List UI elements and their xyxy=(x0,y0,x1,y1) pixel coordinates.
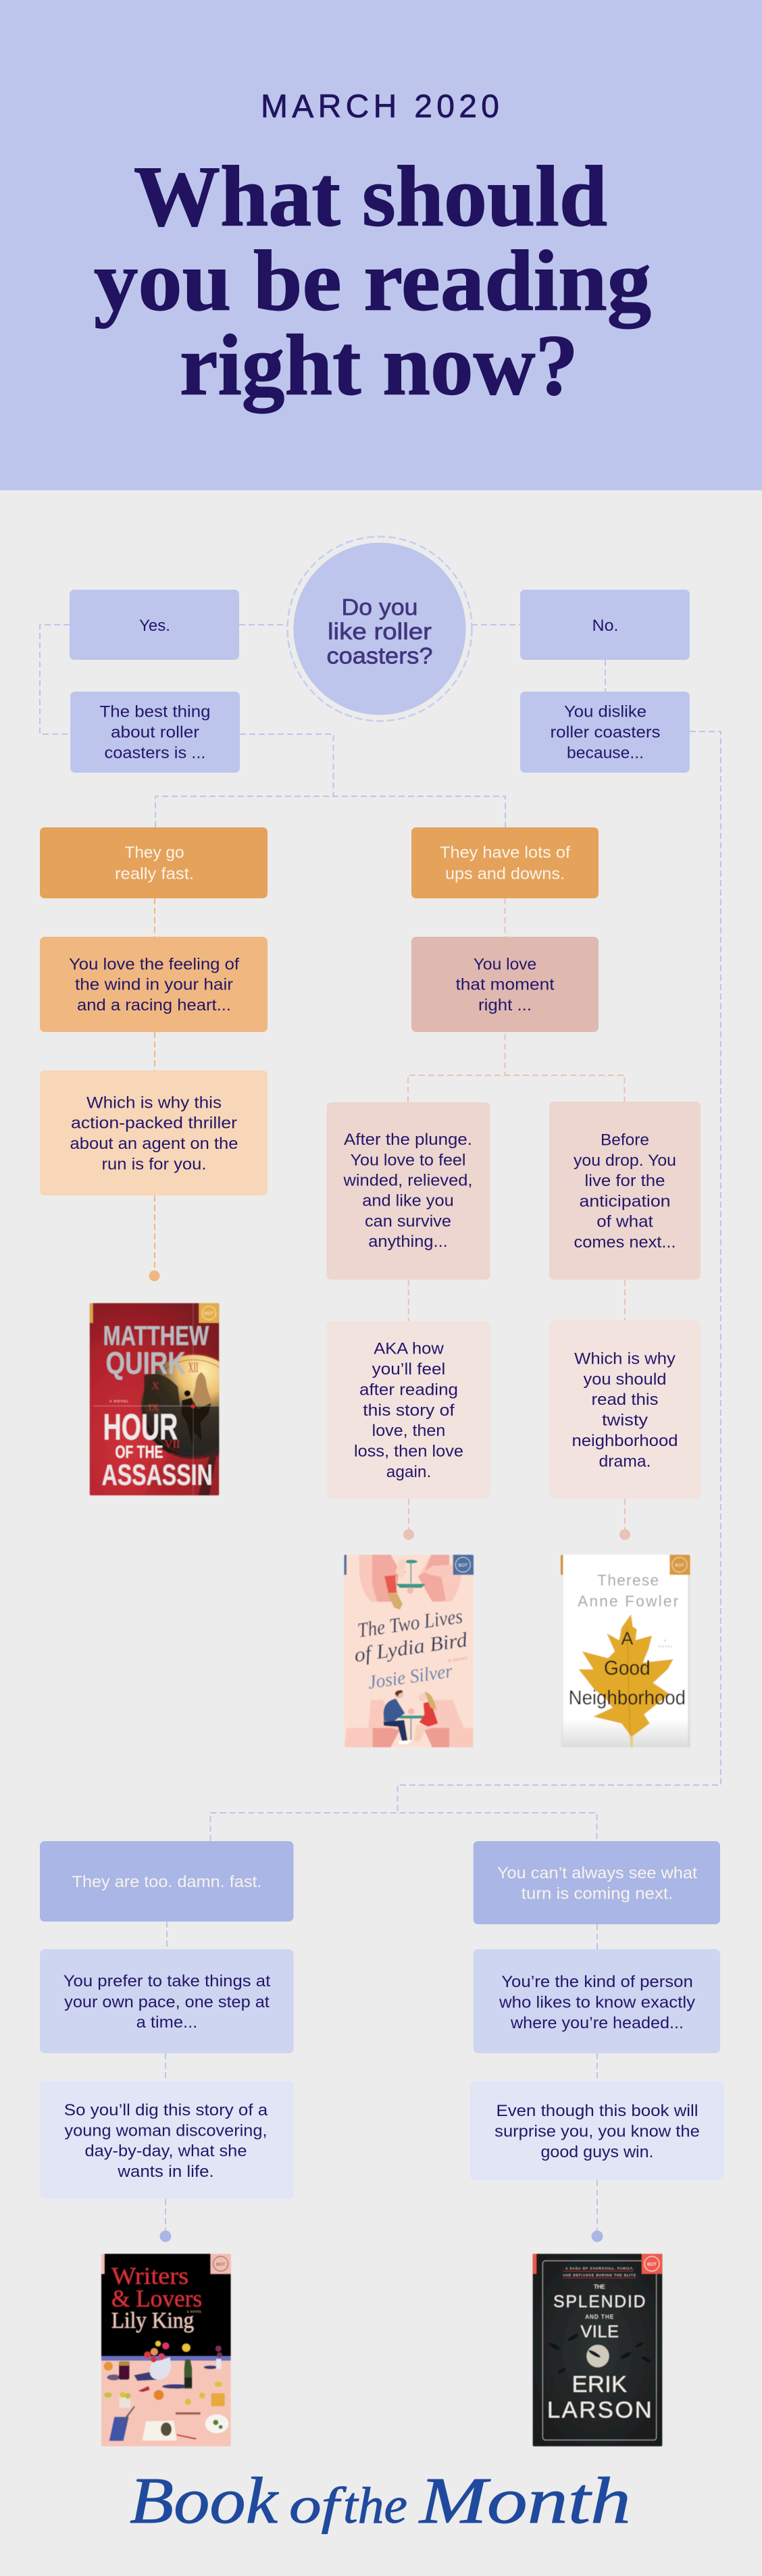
box: action-packed thriller: action-packed thriller xyxy=(71,1114,237,1133)
box: after the plunge xyxy=(326,1102,490,1280)
book: A Good Neighborhood: A xyxy=(664,1639,666,1642)
box: they go really fast: really fast. xyxy=(115,865,194,883)
box: young woman discovering: wants in life. xyxy=(117,2163,214,2181)
box: good guys win xyxy=(470,2081,724,2180)
book: Writers & Lovers: Writers xyxy=(111,2263,188,2290)
box: best thing: about roller xyxy=(111,723,199,742)
box: wind in your hair: and a racing heart... xyxy=(77,996,231,1014)
book: A Good Neighborhood xyxy=(561,1555,690,1747)
book: Writers & Lovers: Lily King xyxy=(111,2309,194,2334)
book: Hour of the Assassin: IX xyxy=(148,1402,159,1413)
box: good guys win: surprise you, you know the xyxy=(494,2123,700,2141)
box: your own pace: a time... xyxy=(136,2013,197,2032)
book: The Two Lives of Lydia Bird: of Lydia Bird xyxy=(353,1628,469,1667)
box: you love that moment: that moment xyxy=(455,976,555,994)
title: What should xyxy=(134,149,607,244)
book: Hour of the Assassin: ASSASSIN xyxy=(101,1459,213,1491)
connectors: top section xyxy=(40,625,721,1841)
box: twisty neighborhood drama: you should xyxy=(584,1370,666,1389)
book: Writers & Lovers: BOT xyxy=(216,2262,226,2267)
box: turn coming next xyxy=(474,1841,720,1924)
connectors: blue branch xyxy=(166,1922,597,2231)
book: A Good Neighborhood: NOVEL xyxy=(659,1645,672,1648)
book: The Splendid and the Vile: VILE xyxy=(580,2323,619,2342)
box: ups and downs xyxy=(411,827,599,898)
book: The Splendid and the Vile: AND DEFIANCE DURING THE BLITZ xyxy=(563,2273,636,2277)
box: young woman discovering: day-by-day, what she xyxy=(85,2142,247,2161)
book: The Two Lives of Lydia Bird: The Two Lives xyxy=(356,1605,464,1642)
book: Hour of the Assassin: OF THE xyxy=(115,1441,163,1462)
box: twisty neighborhood drama: drama. xyxy=(599,1452,651,1470)
book: The Splendid and the Vile: THE xyxy=(594,2283,605,2290)
book: A Good Neighborhood: Good xyxy=(604,1657,651,1679)
box: turn coming next: You can’t always see what xyxy=(497,1864,697,1882)
book: Hour of the Assassin: A NOVEL xyxy=(109,1399,128,1403)
box: too damn fast: They are too. damn. fast. xyxy=(72,1873,262,1891)
box: ups and downs: They have lots of xyxy=(440,844,570,862)
book: The Splendid and the Vile: AND THE xyxy=(585,2314,613,2320)
box: best thing xyxy=(70,692,240,773)
box: twisty neighborhood drama: twisty xyxy=(602,1412,649,1429)
box: best thing: The best thing xyxy=(100,703,211,721)
book: Hour of the Assassin: XII xyxy=(188,1361,199,1376)
book: The Two Lives of Lydia Bird: BOT xyxy=(458,1563,467,1568)
box: after the plunge: anything... xyxy=(368,1233,448,1251)
box: after the plunge: You love to feel xyxy=(350,1151,466,1169)
book: Hour of the Assassin: BOT xyxy=(204,1312,213,1316)
box: before you drop: comes next... xyxy=(574,1233,676,1252)
box: you love that moment: You love xyxy=(474,955,536,973)
box: you dislike: because... xyxy=(567,744,644,763)
book: Hour of the Assassin: HOUR xyxy=(103,1406,178,1448)
box: twisty neighborhood drama: read this xyxy=(592,1391,658,1409)
book: The Splendid and the Vile: LARSON xyxy=(547,2397,652,2423)
logo: Book of the Month: Month xyxy=(418,2465,631,2538)
month label: MARCH 2020 xyxy=(261,89,499,124)
box: before you drop: you drop. You xyxy=(574,1152,676,1170)
question circle: coasters? xyxy=(327,643,432,669)
book: The Splendid and the Vile: ERIK xyxy=(572,2372,627,2398)
dot: orange end xyxy=(149,1270,159,1281)
box: young woman discovering: young woman discovering, xyxy=(65,2121,268,2140)
dot: blue left end xyxy=(159,2230,172,2242)
question circle xyxy=(288,536,472,721)
book: Hour of the Assassin: X xyxy=(152,1381,159,1392)
box: after the plunge: and like you xyxy=(362,1192,454,1210)
box: you love that moment xyxy=(411,937,599,1032)
box: after the plunge: After the plunge. xyxy=(344,1131,472,1149)
box: AKA how you'll feel: loss, then love xyxy=(354,1443,463,1460)
book: The Two Lives of Lydia Bird: Josie Silver xyxy=(366,1660,454,1693)
box: they go really fast: They go xyxy=(124,844,184,862)
dot: pink right end xyxy=(619,1529,630,1540)
question circle: Do you xyxy=(342,595,417,621)
question circle: like roller xyxy=(328,619,432,645)
box: good guys win: Even though this book will xyxy=(496,2102,698,2120)
box: AKA how you'll feel: you’ll feel xyxy=(372,1360,445,1379)
box: before you drop xyxy=(549,1102,701,1280)
box: good guys win: good guys win. xyxy=(540,2143,654,2161)
box: wind in your hair: You love the feeling of xyxy=(69,955,239,973)
book: The Splendid and the Vile: BOT xyxy=(647,2262,657,2267)
box: you dislike: You dislike xyxy=(564,703,646,721)
box: action-packed thriller: about an agent on the xyxy=(70,1135,238,1153)
book: The Two Lives of Lydia Bird: a novel xyxy=(448,1654,468,1664)
box: wind in your hair xyxy=(40,937,268,1032)
box: action-packed thriller: Which is why this xyxy=(86,1093,222,1112)
box: action-packed thriller xyxy=(40,1071,268,1195)
box: AKA how you'll feel: this story of xyxy=(363,1401,455,1420)
box: before you drop: Before xyxy=(601,1131,649,1149)
box: twisty neighborhood drama: neighborhood xyxy=(572,1432,678,1450)
box: know where headed: who likes to know exactly xyxy=(499,1994,696,2012)
book: The Splendid and the Vile: SPLENDID xyxy=(553,2293,645,2311)
title: right now? xyxy=(180,317,578,413)
title: you be reading xyxy=(94,232,651,328)
book: Writers & Lovers: & Lovers xyxy=(111,2285,202,2312)
box: Yes xyxy=(70,590,239,660)
header banner xyxy=(0,0,762,490)
book: A Good Neighborhood: Neighborhood xyxy=(569,1686,686,1709)
box: know where headed xyxy=(474,1949,720,2053)
book: Hour of the Assassin: QUIRK xyxy=(105,1345,186,1381)
box: you dislike: roller coasters xyxy=(550,723,661,742)
box: too damn fast xyxy=(40,1841,293,1922)
box: best thing: coasters is ... xyxy=(104,744,205,763)
logo: Book of the Month xyxy=(130,2465,631,2538)
book: Writers & Lovers: A NOVEL xyxy=(186,2310,202,2313)
box: AKA how you'll feel: AKA how xyxy=(374,1340,444,1358)
box: before you drop: anticipation xyxy=(580,1192,670,1210)
book: The Two Lives of Lydia Bird xyxy=(344,1555,474,1747)
box: your own pace: You prefer to take things at xyxy=(63,1972,270,1990)
box: twisty neighborhood drama: Which is why xyxy=(574,1349,676,1368)
logo: Book of the Month: of xyxy=(289,2477,347,2534)
box: turn coming next: turn is coming next. xyxy=(522,1884,673,1903)
box: after the plunge: can survive xyxy=(365,1212,451,1231)
box: AKA how you'll feel: after reading xyxy=(359,1381,458,1399)
title xyxy=(94,149,651,413)
box: ups and downs: ups and downs. xyxy=(445,865,565,883)
book: Writers & Lovers xyxy=(101,2254,231,2446)
box: twisty neighborhood drama xyxy=(549,1320,701,1499)
book: Hour of the Assassin: MATTHEW xyxy=(103,1320,209,1351)
book: Hour of the Assassin: VII xyxy=(164,1437,180,1450)
box: action-packed thriller: run is for you. xyxy=(101,1155,207,1173)
box: you love that moment: right ... xyxy=(478,996,532,1014)
book: The Splendid and the Vile xyxy=(533,2254,662,2446)
book: The Splendid and the Vile: A SAGA OF CHURCHILL, FAMILY, xyxy=(565,2267,633,2270)
box: before you drop: live for the xyxy=(585,1172,665,1190)
box: you dislike xyxy=(520,692,690,773)
logo: Book of the Month: the xyxy=(343,2477,407,2534)
box: AKA how you'll feel: love, then xyxy=(372,1422,445,1440)
box: your own pace: your own pace, one step at xyxy=(64,1993,270,2011)
connectors: pink branch xyxy=(408,898,625,1529)
box: AKA how you'll feel: again. xyxy=(386,1463,431,1481)
box: your own pace xyxy=(40,1949,293,2053)
box: Yes: Yes. xyxy=(139,617,170,635)
box: No xyxy=(520,590,690,660)
box: young woman discovering: So you’ll dig this story of a xyxy=(64,2101,268,2119)
book: A Good Neighborhood: BOT xyxy=(675,1563,684,1568)
box: they go really fast xyxy=(40,827,268,898)
dot: blue right end xyxy=(592,2230,603,2242)
box: know where headed: where you’re headed... xyxy=(510,2014,684,2032)
box: No: No. xyxy=(592,617,619,635)
box: young woman discovering xyxy=(40,2081,293,2199)
book: A Good Neighborhood: A xyxy=(621,1628,634,1649)
book: Hour of the Assassin xyxy=(89,1302,220,1496)
box: know where headed: You’re the kind of person xyxy=(501,1973,693,1991)
box: wind in your hair: the wind in your hair xyxy=(75,976,233,994)
box: AKA how you'll feel xyxy=(326,1321,490,1499)
book: A Good Neighborhood: Therese xyxy=(597,1572,659,1589)
book: A Good Neighborhood: Anne Fowler xyxy=(578,1592,679,1609)
dot: pink left end xyxy=(403,1529,414,1540)
box: after the plunge: winded, relieved, xyxy=(342,1171,473,1189)
connectors: orange branch xyxy=(154,898,155,1270)
box: before you drop: of what xyxy=(596,1213,653,1231)
logo: Book of the Month: Book xyxy=(130,2465,279,2538)
